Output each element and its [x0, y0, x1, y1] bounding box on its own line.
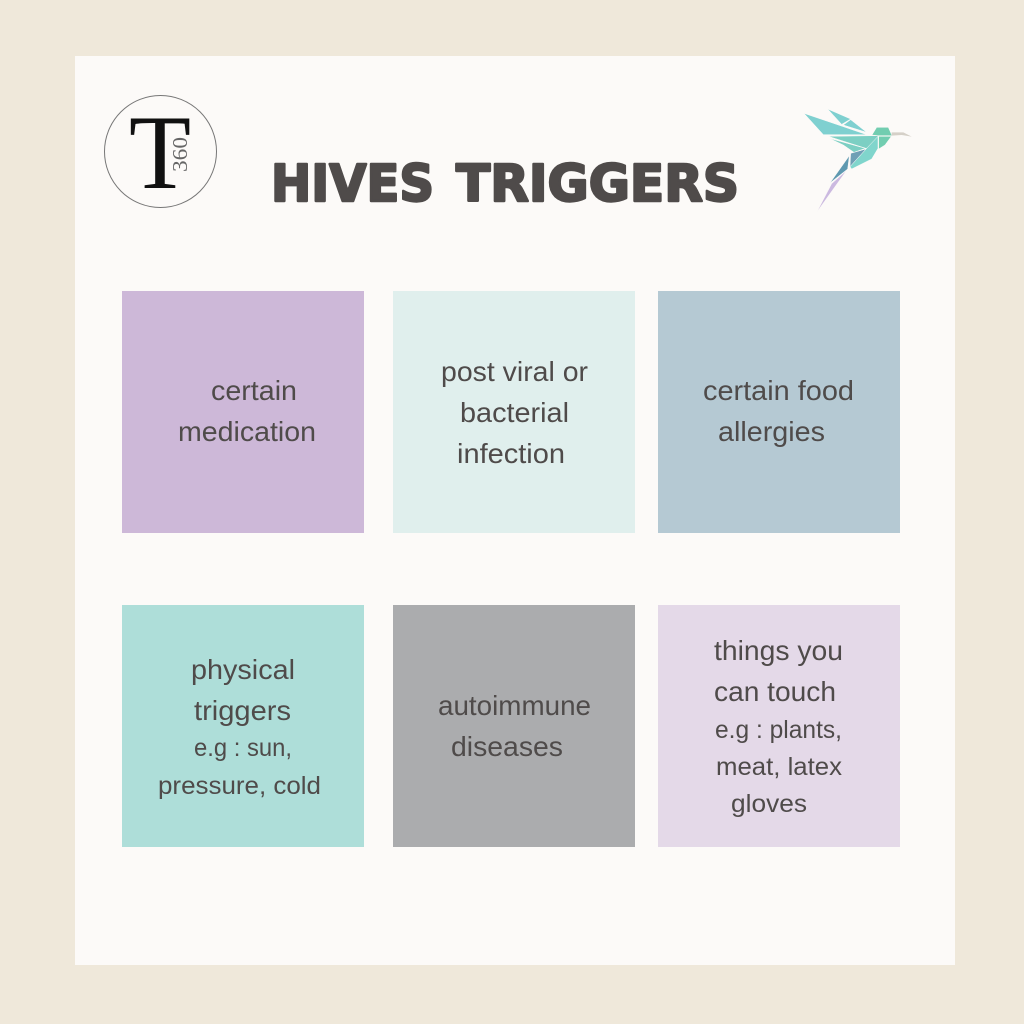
icon: T360 logo: 360 [168, 137, 192, 172]
panel: autoimmune diseases: diseases [451, 731, 563, 762]
icon: T360 logo [104, 94, 216, 211]
panel: autoimmune diseases [393, 605, 635, 847]
panel: things you can touch: meat, latex [716, 753, 843, 781]
title: TRIGGERS [456, 155, 739, 214]
panel: certain food allergies [658, 291, 900, 533]
panel: post viral or bacterial infection: bacterial [460, 397, 569, 428]
panel: certain medication: certain [211, 375, 297, 406]
panel: things you can touch: e.g : plants, [715, 716, 842, 744]
title: HIVES [271, 155, 434, 214]
panel: certain medication: medication [178, 416, 316, 447]
panel: certain medication [122, 291, 364, 533]
panel: main card [75, 56, 955, 965]
panel: autoimmune diseases: autoimmune [438, 690, 591, 721]
panel: physical triggers: e.g : sun, [194, 734, 292, 762]
panel: physical triggers [122, 605, 364, 847]
panel: physical triggers: pressure, cold [158, 772, 321, 800]
panel: post viral or bacterial infection: post viral or [441, 356, 588, 387]
panel: post viral or bacterial infection [393, 291, 635, 533]
icon: T360 logo: T [129, 94, 191, 211]
panel: certain food allergies: certain food [703, 375, 854, 406]
panel: certain food allergies: allergies [718, 416, 825, 447]
icon: hummingbird [804, 109, 912, 212]
panel: things you can touch [658, 605, 900, 847]
panel: post viral or bacterial infection: infection [457, 438, 565, 469]
panel: things you can touch: gloves [731, 790, 807, 818]
panel: physical triggers: physical [191, 654, 295, 685]
panel: things you can touch: can touch [714, 676, 836, 707]
title [271, 155, 739, 214]
panel: physical triggers: triggers [194, 695, 291, 726]
panel: things you can touch: things you [714, 635, 843, 666]
